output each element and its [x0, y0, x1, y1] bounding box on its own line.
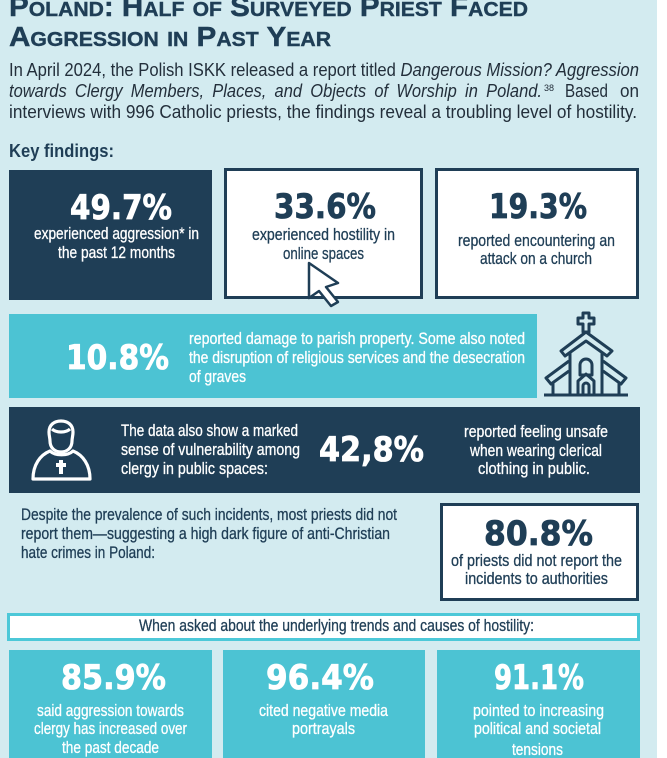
panel: 96.4% negative media: 96.4%: [266, 658, 374, 698]
panel: 10.8% parish damage: 10.8%: [66, 338, 169, 378]
panel: 49.7% aggression: [9, 170, 212, 300]
panel: 96.4% negative media: portrayals: [292, 719, 355, 738]
icon: mouse cursor: [309, 263, 338, 306]
panel: 96.4% negative media: cited negative media: [259, 701, 388, 720]
panel: 91.1% political tensions: political and societal: [474, 719, 601, 738]
panel: 80.8% not reported: of priests did not report the: [451, 551, 622, 570]
panel: 91.1% political tensions: 91.1%: [494, 658, 584, 698]
intro paragraph: interviews with 996 Catholic priests, the findings reveal a troubling level of hostility.: [9, 102, 637, 122]
panel: 80.8% not reported: incidents to authorities: [465, 569, 608, 588]
panel: 42,8% clergy vulnerability: sense of vulnerability among: [121, 440, 300, 459]
panel: 10.8% parish damage: of graves: [189, 367, 246, 386]
panel: 19.3% church attack: attack on a church: [480, 249, 592, 268]
text block: unreported incidents: report them—suggesting a high dark figure of anti-Christian: [21, 524, 390, 543]
panel: 96.4% negative media: [223, 650, 425, 758]
panel: 85.9% aggression increased: said aggression towards: [37, 701, 184, 720]
panel: 10.8% parish damage: the disruption of religious services and the desecration: [189, 348, 525, 367]
panel: 91.1% political tensions: [437, 650, 640, 758]
panel: 91.1% political tensions: pointed to increasing: [473, 701, 604, 720]
icon: church: [544, 313, 628, 395]
heading: key findings: Key findings:: [9, 141, 114, 161]
panel: 85.9% aggression increased: 85.9%: [61, 658, 166, 698]
panel: 42,8% clergy vulnerability: clothing in public.: [478, 459, 590, 478]
panel: 85.9% aggression increased: clergy has increased over: [34, 719, 187, 738]
icon: priest: [33, 421, 90, 479]
intro paragraph: on: [620, 81, 639, 101]
text block: unreported incidents: hate crimes in Poland:: [21, 543, 155, 562]
banner: underlying trends: When asked about the underlying trends and causes of hostility:: [139, 616, 534, 635]
text block: unreported incidents: [21, 505, 397, 562]
panel: 85.9% aggression increased: the past decade: [62, 738, 159, 757]
panel: 42,8% clergy vulnerability: clergy in public spaces:: [121, 459, 268, 478]
banner: underlying trends: [8, 614, 638, 640]
intro paragraph: [9, 60, 639, 122]
panel: 49.7% aggression: the past 12 months: [58, 243, 175, 262]
panel: 33.6% online hostility: 33.6%: [274, 187, 376, 227]
intro paragraph: towards Clergy Members, Places, and Objects of Worship in Poland.: [9, 81, 542, 101]
panel: 42,8% clergy vulnerability: The data also show a marked: [121, 421, 298, 440]
title: [9, 0, 528, 52]
panel: 33.6% online hostility: online spaces: [283, 244, 364, 263]
panel: 80.8% not reported: 80.8%: [484, 514, 593, 554]
intro paragraph: In April 2024, the Polish ISKK released a report titled Dangerous Mission? Aggression: [9, 60, 639, 80]
panel: 10.8% parish damage: reported damage to parish property. Some also noted: [189, 329, 525, 348]
panel: 42,8% clergy vulnerability: [9, 407, 640, 493]
intro paragraph: Based: [565, 81, 608, 101]
panel: 49.7% aggression: 49.7%: [70, 188, 172, 228]
panel: 80.8% not reported: [442, 504, 638, 600]
panel: 10.8% parish damage: [9, 314, 537, 398]
panel: 33.6% online hostility: [226, 170, 422, 306]
panel: 49.7% aggression: experienced aggression* in: [34, 224, 199, 243]
panel: 19.3% church attack: 19.3%: [489, 187, 587, 227]
panel: 33.6% online hostility: experienced hostility in: [252, 225, 395, 244]
intro paragraph: 38: [544, 83, 554, 93]
panel: 42,8% clergy vulnerability: 42,8%: [319, 430, 424, 470]
title: Aggression in Past Year: [9, 21, 332, 52]
panel: 85.9% aggression increased: [9, 650, 212, 758]
text block: unreported incidents: Despite the prevalence of such incidents, most priests did not: [21, 505, 397, 524]
panel: 19.3% church attack: [436, 170, 638, 298]
panel: 42,8% clergy vulnerability: reported feeling unsafe: [464, 422, 608, 441]
panel: 19.3% church attack: reported encountering an: [458, 231, 615, 250]
panel: 42,8% clergy vulnerability: when wearing clerical: [469, 441, 602, 460]
